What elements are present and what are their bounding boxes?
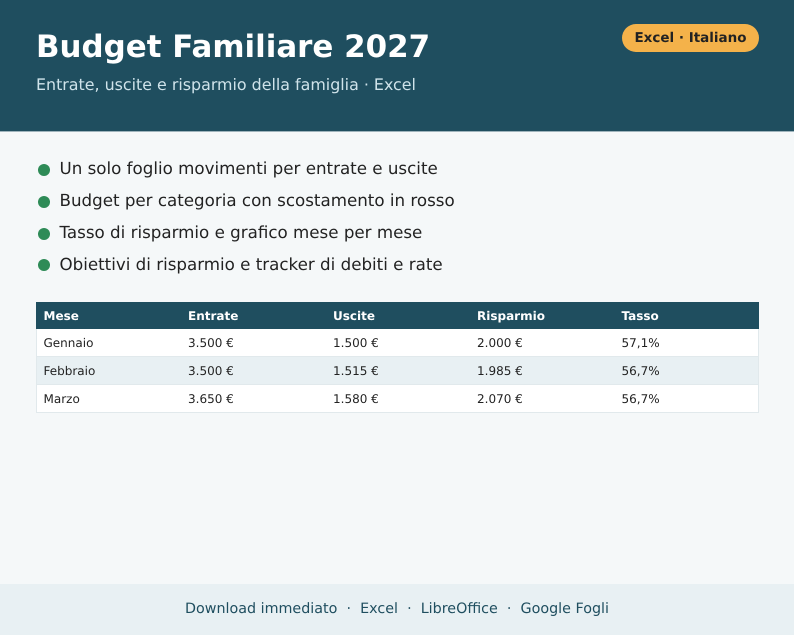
row: Marzo: 3.650 €	[188, 392, 234, 406]
table header row: Entrate	[188, 309, 238, 323]
title: Budget Familiare 2027	[36, 29, 430, 65]
row: Marzo: 2.070 €	[477, 392, 523, 406]
row: Gennaio: 3.500 €	[188, 336, 234, 350]
row: Marzo: 56,7%	[622, 392, 660, 406]
bullet: risparmio: Tasso di risparmio e grafico mese per mese	[60, 222, 422, 242]
footer band: Download immediato · Excel · LibreOffice · Google Fogli	[185, 601, 609, 617]
row: Gennaio: 1.500 €	[333, 336, 379, 350]
row: Marzo	[36, 385, 758, 413]
feature list	[38, 158, 455, 274]
table header row: Uscite	[333, 309, 375, 323]
row: Febbraio: 3.500 €	[188, 364, 234, 378]
row: Febbraio: 1.515 €	[333, 364, 379, 378]
badge: format and language	[622, 24, 759, 52]
row: Febbraio: Febbraio	[44, 364, 95, 378]
row: Gennaio: Gennaio	[44, 336, 93, 350]
row: Gennaio: 2.000 €	[477, 336, 523, 350]
row: Gennaio: 57,1%	[622, 336, 660, 350]
footer band	[0, 584, 794, 635]
subtitle: Entrate, uscite e risparmio della famiglia · Excel	[36, 75, 416, 94]
table header row	[36, 302, 758, 329]
row: Marzo: 1.580 €	[333, 392, 379, 406]
bullet: movimenti: Un solo foglio movimenti per entrate e uscite	[60, 158, 438, 178]
row: Febbraio: 1.985 €	[477, 364, 523, 378]
badge: format and language: Excel · Italiano	[634, 30, 747, 46]
row: Febbraio: 56,7%	[622, 364, 660, 378]
row: Gennaio	[36, 329, 758, 357]
row: Febbraio	[36, 357, 758, 385]
bullet: budget: Budget per categoria con scostamento in rosso	[60, 190, 455, 210]
table header row: Tasso	[622, 309, 659, 323]
table header row: Risparmio	[477, 309, 545, 323]
bullet: obiettivi: Obiettivi di risparmio e tracker di debiti e rate	[60, 254, 443, 274]
row: Marzo: Marzo	[44, 392, 80, 406]
header band	[0, 0, 794, 132]
table header row: Mese	[44, 309, 79, 323]
table: monthly budget	[36, 302, 759, 413]
